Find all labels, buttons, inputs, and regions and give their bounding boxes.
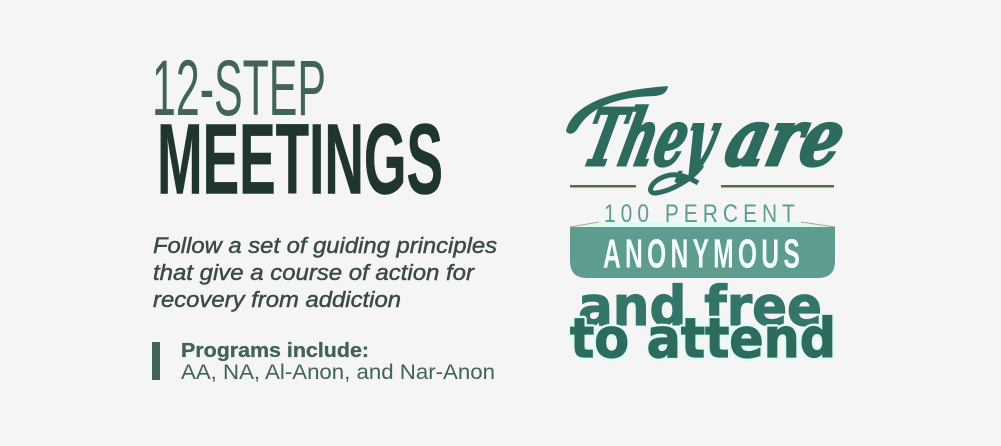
- accent bar: [152, 342, 160, 380]
- programs callout: [152, 340, 495, 384]
- description text: that give a course of action for: [153, 260, 476, 285]
- badge: they are anonymous and free: [566, 86, 854, 370]
- script heading: They are: are: [717, 92, 854, 184]
- subheading: 100 percent: 100 PERCENT: [604, 200, 800, 228]
- title: 12-step meetings: MEETINGS: [157, 104, 443, 216]
- title: 12-step meetings: 12-STEP: [152, 43, 326, 132]
- and free: and free: [578, 275, 822, 338]
- ribbon band: [570, 222, 835, 278]
- title: 12-step meetings: [152, 43, 443, 216]
- description text: recovery from addiction: [153, 287, 401, 312]
- programs text: [181, 340, 495, 384]
- to attend: to attend: [570, 307, 836, 370]
- programs text: Programs include:: [181, 340, 369, 362]
- programs text: AA, NA, Al-Anon, and Nar-Anon: [181, 361, 495, 384]
- script heading: They are: They: [576, 92, 729, 184]
- decorative rules: [570, 185, 834, 188]
- to attend: to attend: [570, 307, 836, 370]
- description text: [153, 233, 497, 312]
- ribbon text: ANONYMOUS: [603, 230, 804, 276]
- description text: Follow a set of guiding principles: [153, 233, 497, 258]
- script heading: They are: [566, 86, 854, 193]
